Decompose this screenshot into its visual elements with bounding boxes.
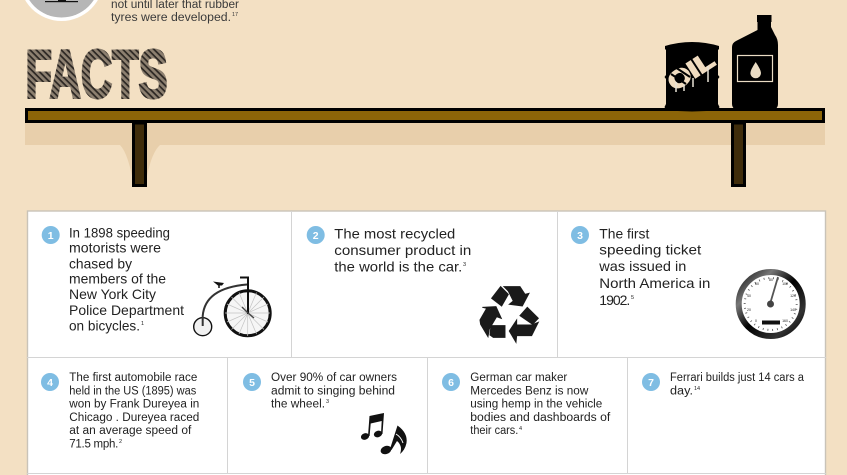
fact 1: Police Department	[69, 302, 184, 318]
fact 1: In 1898 speeding	[69, 224, 170, 240]
fact 1: chased by	[69, 255, 132, 271]
fact 6: bodies and dashboards of	[470, 412, 611, 424]
fact 2: the world is the car.	[334, 258, 462, 274]
icon: speedometer: 20	[747, 308, 751, 312]
icon: speedometer: 100	[782, 282, 788, 286]
icon: speedometer: 120	[790, 294, 796, 298]
fact 6: 4	[519, 426, 522, 432]
fact 7: 14	[694, 386, 700, 392]
shelf shadow	[25, 123, 825, 176]
fact 6: their cars.	[470, 425, 518, 437]
fact 4: held in the US (1895) was	[69, 385, 197, 397]
fact 5: 3	[326, 399, 329, 405]
fact 4: 4	[47, 377, 53, 389]
icon: speedometer: 0	[755, 319, 757, 323]
fact 1: 1	[141, 321, 144, 327]
fact 5: admit to singing behind	[271, 385, 395, 397]
fact 4	[41, 372, 199, 450]
fact 4: at an average speed of	[69, 425, 192, 437]
icon: oil bottle	[732, 15, 778, 109]
fact 3: speeding ticket	[599, 242, 701, 258]
icon: music notes	[360, 413, 407, 456]
fact 5	[243, 372, 397, 411]
fact 3: 3	[577, 230, 583, 242]
fact 5: 5	[249, 377, 255, 389]
fact 3: was issued in	[598, 258, 686, 274]
fact 7: day.	[670, 385, 693, 397]
text: rubber tyres note: 17	[232, 12, 238, 18]
icon: recycling symbol	[480, 287, 538, 342]
fact 4: Chicago . Dureyea raced	[69, 412, 199, 424]
fact 3	[571, 225, 710, 308]
fact 4: 2	[119, 439, 122, 445]
fact 6: 6	[448, 377, 454, 389]
fact 6	[442, 372, 611, 437]
icon: cropped grey circle	[20, 0, 104, 21]
icon: speedometer	[739, 272, 803, 336]
fact 6: Mercedes Benz is now	[470, 385, 589, 397]
shelf	[26, 110, 824, 186]
text: rubber tyres note: tyres were developed.	[111, 12, 231, 24]
icon: speedometer: 140	[790, 308, 796, 312]
fact 1	[42, 224, 184, 333]
panel: facts grid	[27, 211, 826, 475]
icon: speedometer: 160	[782, 319, 788, 323]
fact 1: on bicycles.	[69, 317, 140, 333]
fact 7: Ferrari builds just 14 cars a	[670, 372, 805, 384]
fact 6: using hemp in the vehicle	[470, 399, 602, 411]
fact 2: 2	[313, 230, 319, 242]
fact 1: members of the	[69, 271, 166, 287]
fact 2: The most recycled	[334, 225, 455, 241]
fact 3: 5	[631, 295, 634, 301]
icon: penny-farthing bicycle	[194, 278, 270, 336]
icon: oil barrel	[663, 42, 720, 112]
fact 1: motorists were	[69, 240, 161, 256]
fact 1: 1	[48, 230, 54, 242]
fact 1: New York City	[69, 286, 156, 302]
fact 2	[307, 225, 471, 274]
fact 4: won by Frank Dureyea in	[68, 399, 199, 411]
fact 7: 7	[648, 377, 654, 389]
fact 5: Over 90% of car owners	[271, 372, 397, 384]
icon: speedometer: 60	[755, 282, 759, 286]
fact 2: consumer product in	[334, 242, 471, 258]
fact 4: The first automobile race	[69, 372, 197, 384]
icon: speedometer: 40	[747, 294, 751, 298]
icon: speedometer: 80	[769, 278, 773, 282]
icon: oil barrel: OIL	[663, 46, 720, 96]
fact 7	[642, 372, 805, 397]
fact 4: 71.5 mph.	[69, 438, 118, 450]
fact 6: German car maker	[470, 372, 567, 384]
fact 3: 1902.	[599, 292, 630, 308]
fact 2: 3	[463, 262, 466, 268]
text: rubber tyres note	[111, 0, 239, 24]
fact 5: the wheel.	[271, 399, 325, 411]
fact 3: North America in	[599, 275, 710, 291]
fact 3: The first	[599, 225, 649, 241]
heading: facts: FACTS	[26, 36, 168, 112]
